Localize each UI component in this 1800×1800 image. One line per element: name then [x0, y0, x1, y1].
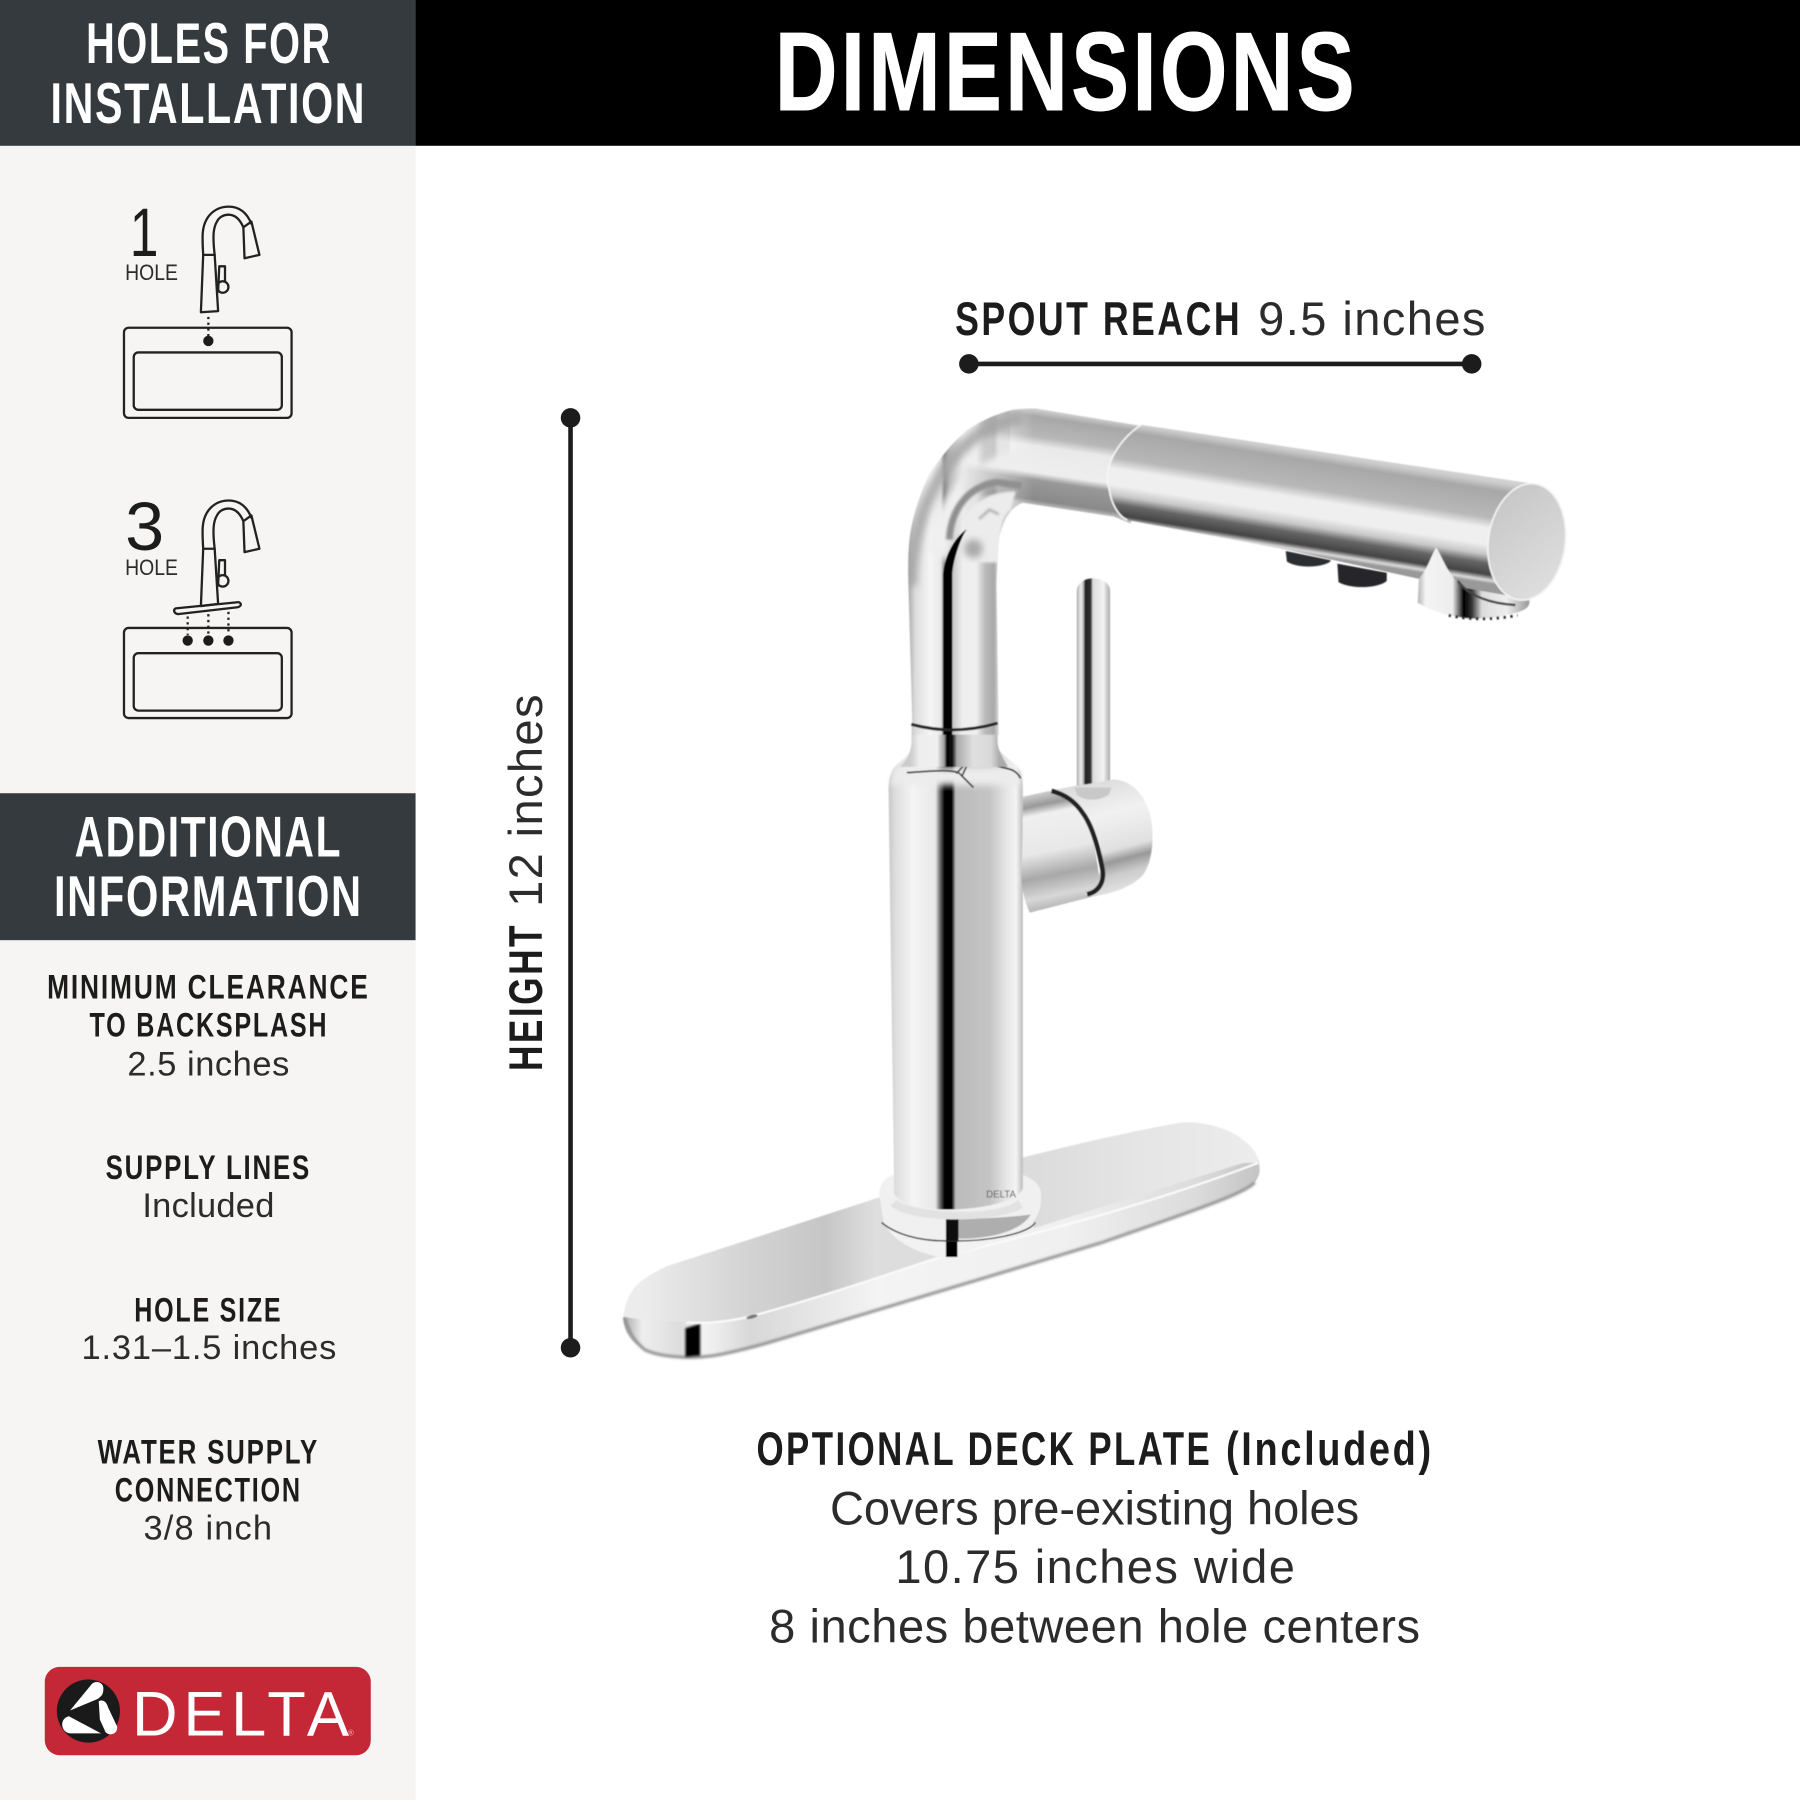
delta logo — [45, 1667, 371, 1755]
deck plate caption: (Included) — [1226, 1422, 1434, 1475]
delta logo: DELTA — [132, 1680, 349, 1750]
deck plate caption: 8 inches between hole centers — [769, 1600, 1420, 1653]
lever handle — [1077, 578, 1110, 792]
deck plate caption: Covers pre-existing holes — [830, 1481, 1359, 1534]
spec: supply lines — [106, 1149, 311, 1225]
height label: 12 inches — [499, 695, 552, 907]
spec: hole size: HOLE SIZE — [134, 1291, 282, 1329]
deck plate caption: 10.75 inches wide — [895, 1540, 1295, 1593]
spec: minimum clearance: 2.5 inches — [127, 1046, 289, 1084]
spec: water supply connection: 3/8 inch — [143, 1509, 272, 1547]
header band: additional information: INFORMATION — [54, 865, 363, 929]
header band: holes for installation — [0, 0, 416, 146]
neck ring — [911, 723, 998, 730]
deck plate caption: OPTIONAL DECK PLATE — [757, 1422, 1212, 1475]
spec: water supply connection: CONNECTION — [115, 1472, 302, 1510]
handle hub — [1021, 779, 1153, 913]
neck collar — [900, 723, 1008, 767]
spec: minimum clearance: TO BACKSPLASH — [90, 1007, 328, 1045]
spray nozzle — [1418, 548, 1529, 619]
plate reflection of the collar — [883, 1217, 1033, 1258]
faucet product illustration — [623, 390, 1573, 1357]
icon: 1 hole installation: HOLE — [125, 260, 178, 285]
height dimension line — [561, 408, 580, 1357]
title band: dimensions: DIMENSIONS — [775, 9, 1358, 134]
header band: additional information — [0, 793, 416, 940]
pull-out spray wand — [1107, 425, 1538, 603]
spec: minimum clearance — [47, 969, 370, 1084]
delta logo: ® — [348, 1729, 354, 1738]
header band: holes for installation: HOLES FOR — [86, 12, 332, 76]
height label: HEIGHT — [499, 923, 552, 1071]
icon: 3 hole installation — [124, 488, 292, 718]
spout end cap — [1481, 479, 1573, 605]
sidebar background panel — [0, 0, 416, 1800]
spec: hole size — [82, 1291, 336, 1367]
spout reach label: SPOUT REACH — [955, 292, 1242, 345]
icon: 1 hole installation — [124, 194, 292, 418]
icon: 3 hole installation: 3 — [125, 488, 164, 565]
deck plate caption — [757, 1422, 1434, 1653]
shoulder highlights — [890, 759, 1022, 788]
base collar — [879, 1174, 1041, 1241]
delta body mark: DELTA — [986, 1189, 1016, 1200]
spec: minimum clearance: MINIMUM CLEARANCE — [47, 969, 370, 1007]
spec: water supply connection: WATER SUPPLY — [98, 1434, 319, 1472]
icon: 1 hole installation: 1 — [130, 194, 158, 271]
header band: holes for installation: INSTALLATION — [51, 72, 366, 136]
icon: 3 hole installation: HOLE — [125, 555, 178, 580]
spout reach dimension line — [959, 354, 1481, 374]
spec: supply lines: SUPPLY LINES — [106, 1149, 311, 1187]
faucet body column — [889, 750, 1023, 1209]
spec: water supply connection — [98, 1434, 319, 1547]
spec: hole size: 1.31–1.5 inches — [82, 1329, 336, 1367]
header band: additional information: ADDITIONAL — [75, 805, 342, 869]
height label — [499, 695, 552, 1071]
deck plate — [623, 1122, 1260, 1357]
spout column, bend and neck — [895, 390, 1159, 735]
spec: supply lines: Included — [142, 1187, 274, 1225]
black mounting knobs — [1286, 551, 1387, 587]
spout reach label: 9.5 inches — [1258, 292, 1485, 345]
title band: dimensions — [416, 0, 1800, 146]
